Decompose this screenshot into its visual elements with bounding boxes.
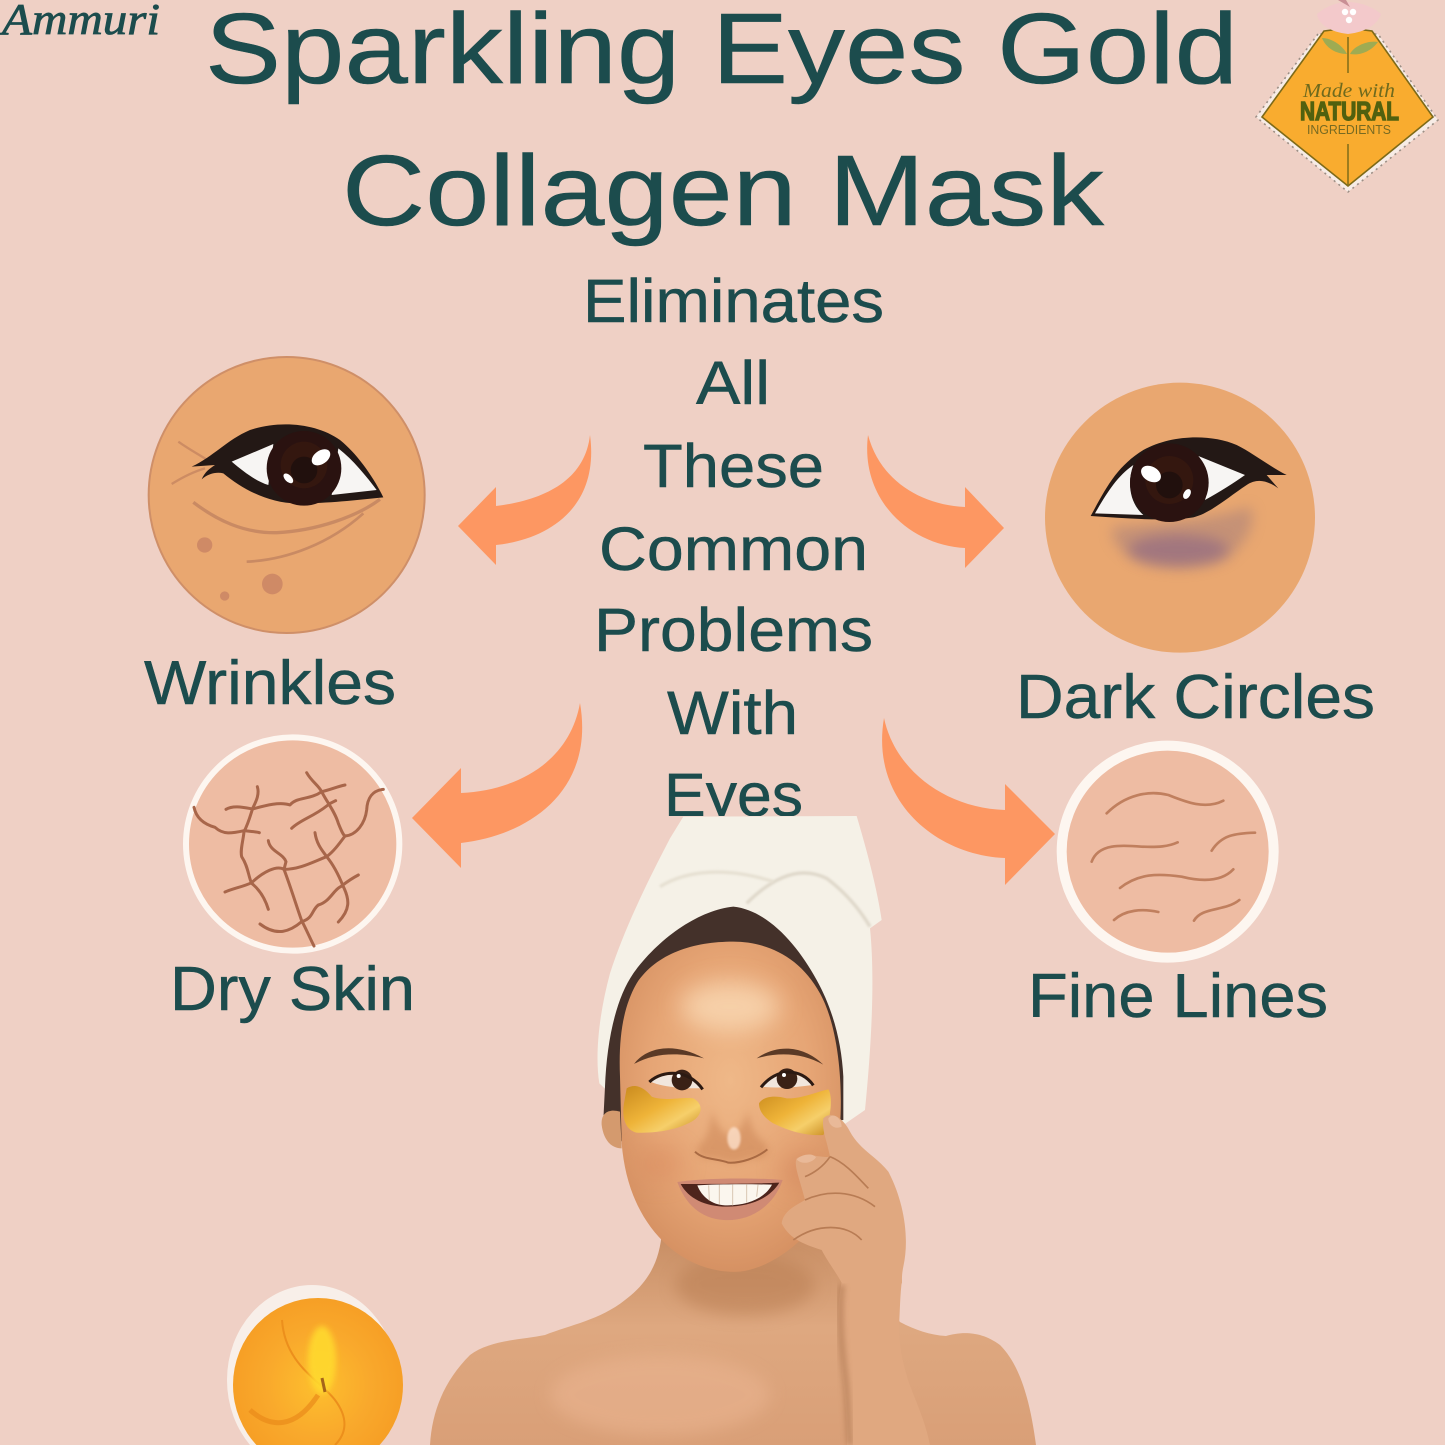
arrow: to dark circles — [867, 435, 1004, 568]
central text: Problems — [594, 596, 873, 664]
label: wrinkles: Wrinkles — [144, 649, 396, 718]
badge flower — [1317, 0, 1381, 34]
label: fine lines: Fine Lines — [1028, 962, 1328, 1031]
eyes — [650, 1075, 702, 1088]
central text: Eyes — [664, 761, 803, 829]
central text: All — [696, 349, 770, 417]
ear — [602, 1111, 622, 1148]
eyebrows — [634, 1048, 823, 1065]
icon: fine lines — [1062, 746, 1274, 958]
label: dark circles: Dark Circles — [1016, 663, 1375, 732]
gold eye patches — [623, 1086, 701, 1133]
arrow: to fine lines — [882, 718, 1055, 885]
central text: These — [643, 432, 824, 500]
badge text: Made with — [1302, 80, 1395, 102]
badge: made with natural ingredients — [1256, 0, 1438, 192]
icon: dark circles eye — [1045, 383, 1315, 653]
central text — [583, 267, 884, 829]
product jar of gold patches — [227, 1285, 403, 1445]
badge text: INGREDIENTS — [1307, 122, 1391, 137]
label: dry skin: Dry Skin — [170, 955, 415, 1024]
badge text — [1300, 80, 1399, 137]
towel — [598, 816, 882, 1125]
title: Collagen Mask — [342, 135, 1105, 247]
nose — [697, 1110, 768, 1162]
woman with gold eye patches — [430, 816, 1036, 1445]
hair — [603, 907, 843, 1143]
face — [620, 942, 841, 1272]
hand and fingers — [782, 1115, 906, 1283]
icon: wrinkles eye — [149, 357, 425, 633]
central text: Common — [599, 515, 868, 583]
central text: Eliminates — [583, 267, 884, 335]
smile — [677, 1178, 783, 1220]
arm — [838, 1280, 930, 1445]
title — [205, 0, 1238, 247]
teeth — [697, 1184, 772, 1205]
arrow: to dry skin — [412, 703, 582, 868]
arrow: to wrinkles — [458, 435, 591, 565]
shoulders and neck — [430, 1230, 1036, 1445]
badge leaves — [1322, 38, 1378, 54]
badge text: NATURAL — [1300, 96, 1399, 126]
fingernails — [797, 1116, 842, 1163]
icon: dry skin — [186, 737, 399, 951]
central text: With — [667, 679, 798, 747]
